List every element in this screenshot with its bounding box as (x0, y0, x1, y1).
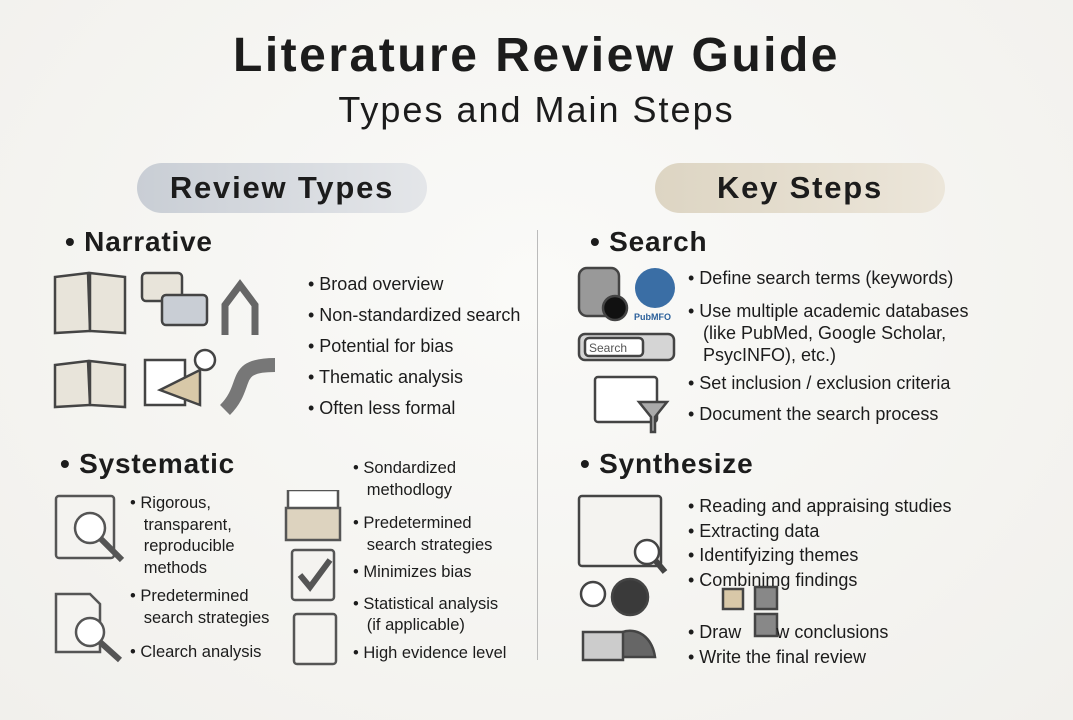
icons: systematic (54, 490, 342, 666)
bullets: narrative: • Thematic analysis (308, 367, 463, 387)
bullets: systematic left: methods (144, 558, 207, 576)
heading: systematic: • Systematic (60, 448, 235, 479)
bullets: synthesize: • Extracting data (688, 521, 819, 541)
bullets: systematic left: reproducible (144, 537, 235, 555)
text: search strategies (144, 609, 269, 627)
text: • Predetermined (130, 587, 249, 605)
heading: narrative: • Narrative (65, 226, 213, 257)
text: • High evidence level (353, 644, 506, 662)
bullets: systematic right: methodlogy (367, 481, 452, 499)
bullets: systematic right (353, 459, 456, 499)
text: • Statistical analysis (353, 595, 498, 613)
bullets: synthesize: • Reading and appraising studies (688, 496, 951, 516)
bullets: synthesize (688, 496, 951, 590)
text: • Write the final review (688, 647, 866, 667)
bullets: search: • Define search terms (keywords) (688, 268, 953, 288)
title: Literature Review Guide (233, 29, 840, 82)
bullets: systematic left: transparent, (144, 516, 232, 534)
icons: search (578, 266, 676, 434)
bullets: narrative: • Broad overview (308, 274, 443, 294)
subtitle: Types and Main Steps (338, 89, 735, 130)
bullets: systematic right: • Sondardized (353, 459, 456, 477)
text: • Clearch analysis (130, 643, 261, 661)
text: PsycINFO), etc.) (703, 345, 836, 365)
text: • Set inclusion / exclusion criteria (688, 373, 950, 393)
pill: key steps (655, 163, 945, 213)
bullets: systematic left (130, 494, 235, 576)
bullets: narrative (308, 274, 520, 418)
text: • Minimizes bias (353, 563, 472, 581)
text: (if applicable) (367, 616, 465, 634)
heading: synthesize: • Synthesize (580, 448, 753, 479)
bullets: narrative: • Non-standardized search (308, 305, 520, 325)
bullets: systematic left: • Rigorous, (130, 494, 211, 512)
icons: search: PubMFO (634, 312, 671, 322)
icons: synthesize (578, 494, 778, 662)
text: (like PubMed, Google Scholar, (703, 323, 946, 343)
text: search strategies (367, 536, 492, 554)
bullets: narrative: • Potential for bias (308, 336, 453, 356)
bullets: synthesize: • Combinimg findings (688, 570, 857, 590)
text: • Use multiple academic databases (688, 301, 968, 321)
text: • Predetermined (353, 514, 472, 532)
text: • Draw w conclusions (688, 622, 888, 642)
icons: search: Search (589, 341, 627, 355)
heading: search: • Search (590, 226, 707, 257)
pill: key steps: Key Steps (717, 170, 883, 205)
icons: narrative (54, 272, 275, 415)
text: • Document the search process (688, 404, 938, 424)
bullets: narrative: • Often less formal (308, 398, 455, 418)
pill: review types (137, 163, 427, 213)
pill: review types: Review Types (170, 170, 394, 205)
bullets: synthesize: • Identifyizing themes (688, 545, 858, 565)
